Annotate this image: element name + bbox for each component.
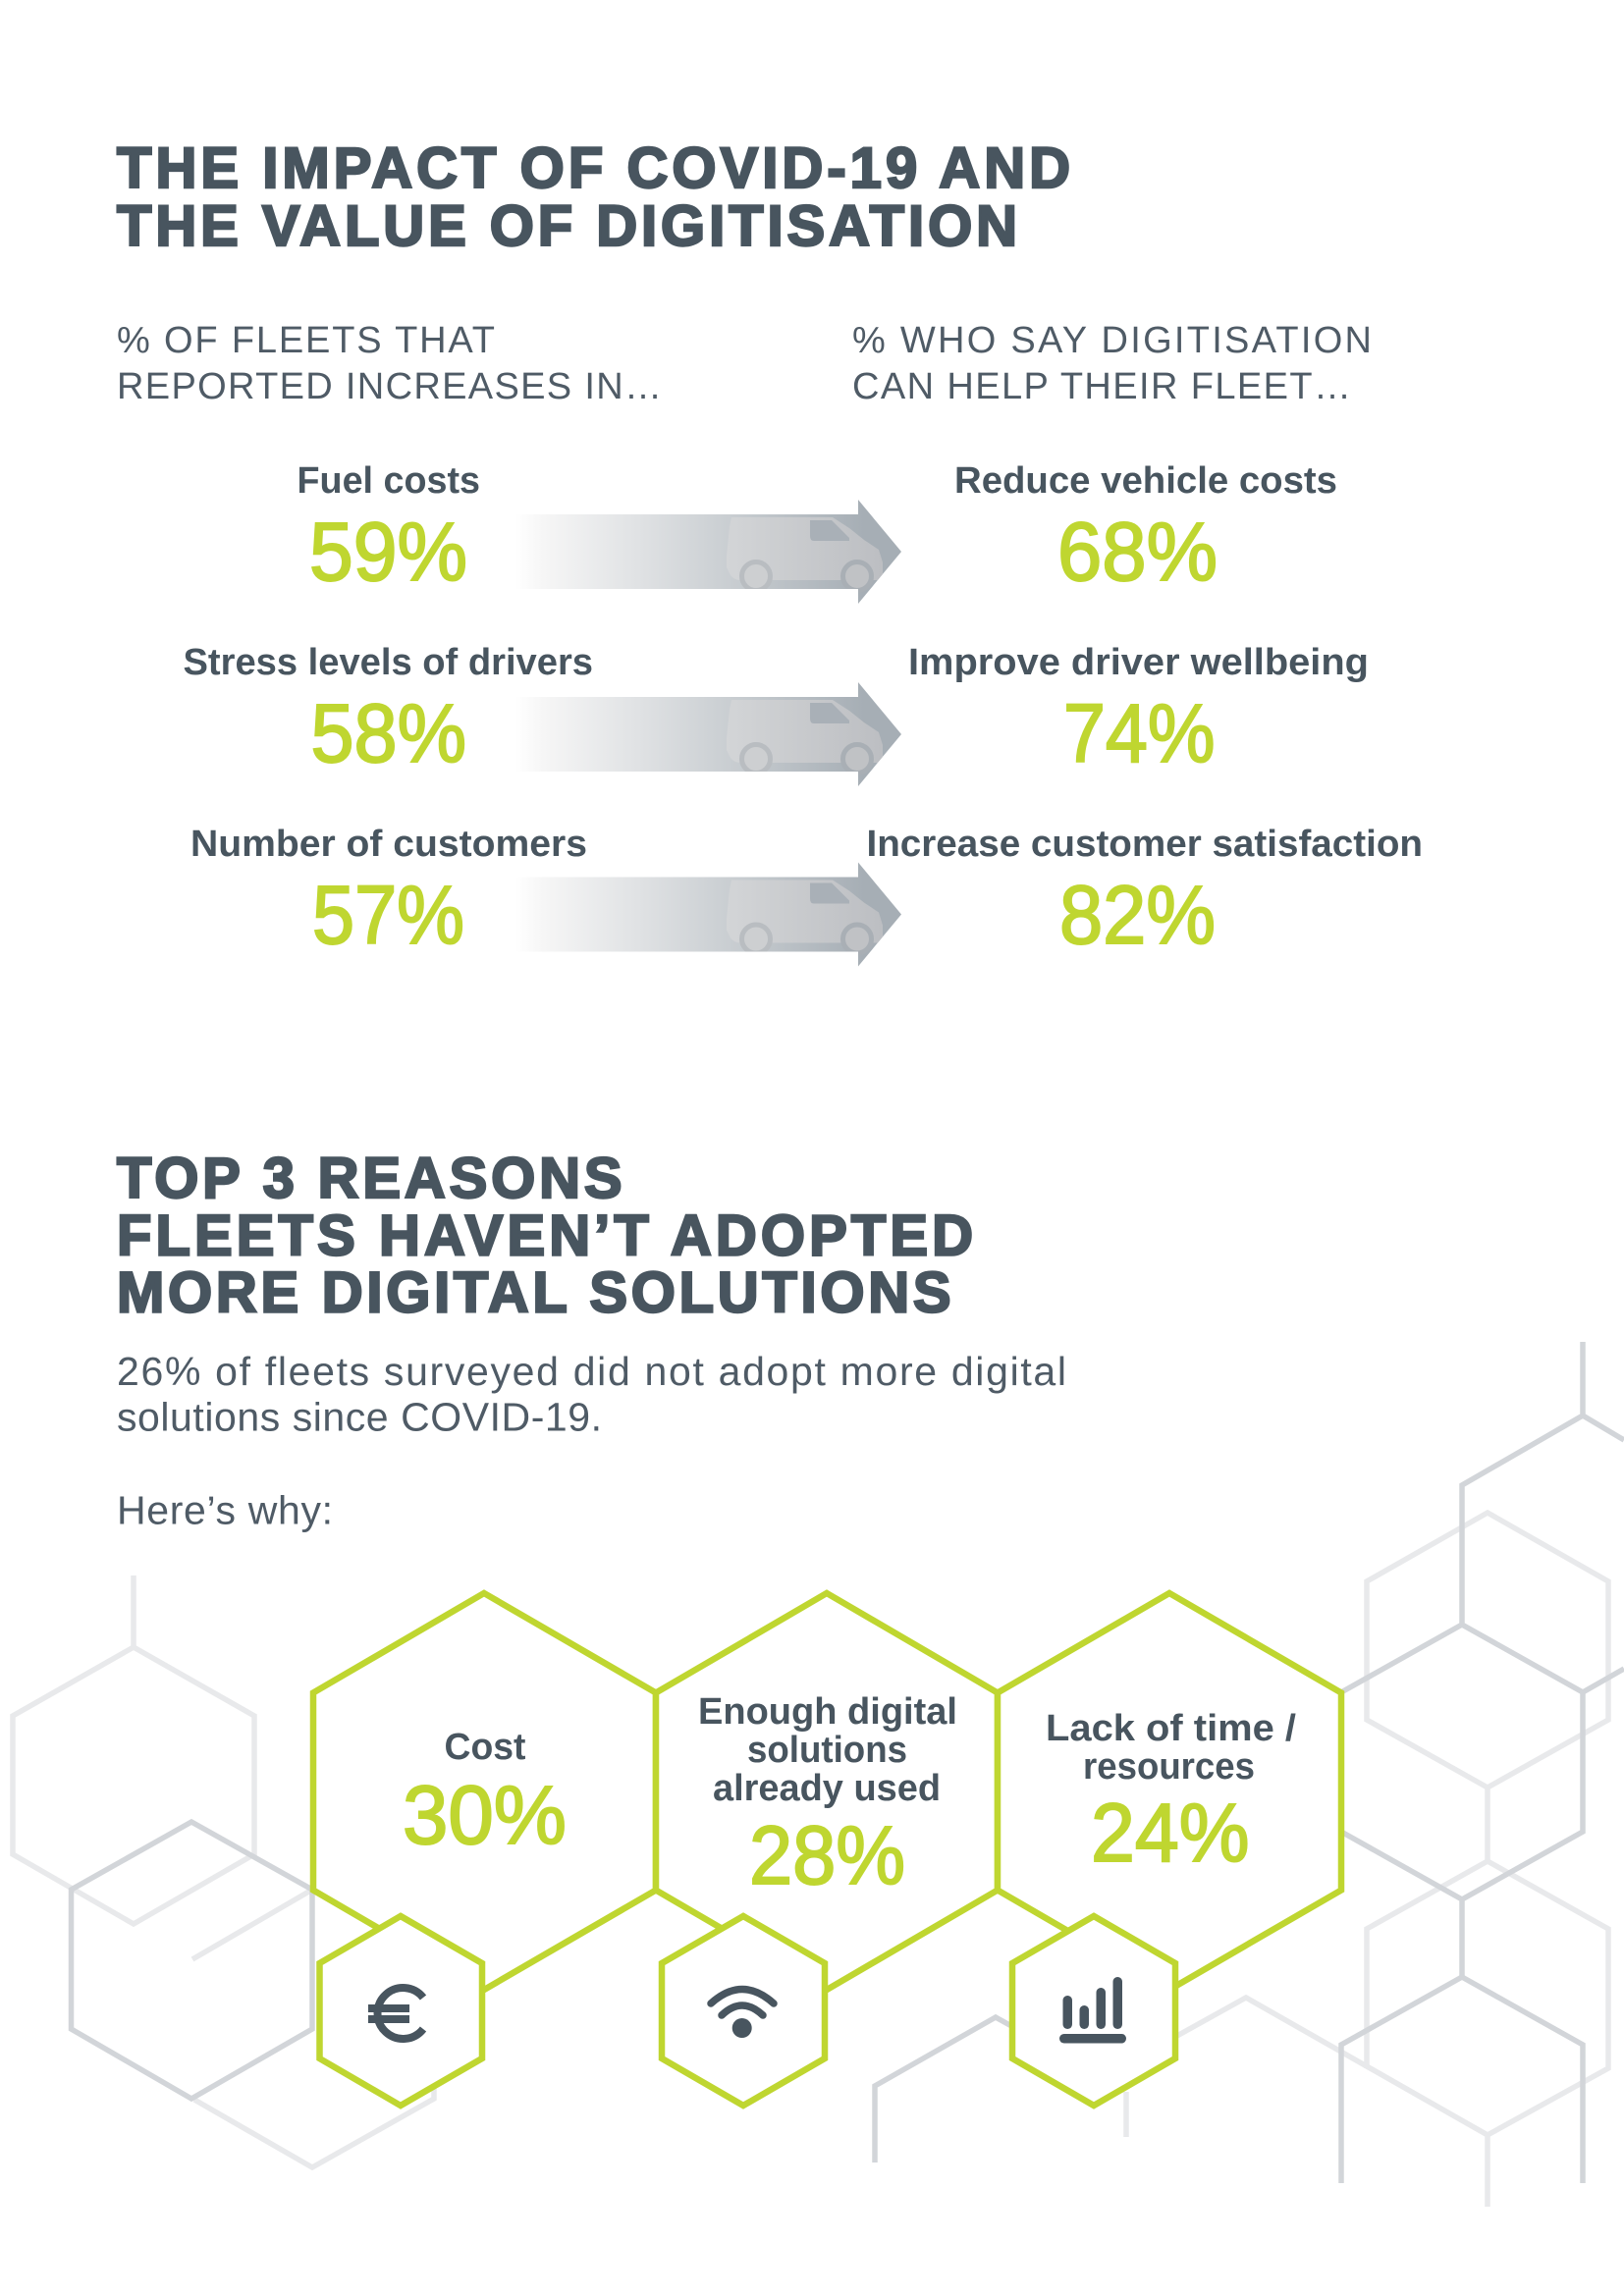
heading: impact of COVID-19: THE IMPACT OF COVID-19 AND	[117, 136, 1070, 200]
right column subheading	[852, 320, 1372, 407]
stat: stress levels 58%: 58%	[310, 687, 466, 779]
icon: bar chart	[1012, 1916, 1175, 2106]
stat: increase customer satisfaction 82%: Increase customer satisfaction	[866, 824, 1423, 865]
hexagon panel: enough digital solutions	[656, 1593, 998, 2106]
hexagon panel: enough digital solutions: already used	[713, 1768, 941, 1809]
arrow with van: row 2	[515, 682, 901, 786]
icon: euro	[320, 1916, 482, 2106]
stat: improve driver wellbeing 74%	[908, 642, 1369, 779]
hexagon panel: enough digital solutions: Enough digital	[698, 1691, 957, 1733]
hexagon panel: lack of time: 24%	[1091, 1787, 1249, 1879]
stat: reduce vehicle costs 68%	[954, 460, 1337, 598]
left column subheading: REPORTED INCREASES IN…	[117, 366, 662, 407]
arrow with van: row 3	[515, 862, 901, 966]
stat: stress levels 58%: Stress levels of drivers	[183, 642, 593, 683]
stat: fuel costs 59%	[297, 460, 480, 598]
hexagon panel: enough digital solutions: solutions	[747, 1730, 907, 1771]
stat: number of customers 57%: 57%	[312, 869, 464, 961]
hexagon panel: cost: Cost	[444, 1727, 526, 1768]
hexagon panel: cost: 30%	[403, 1769, 567, 1861]
left column subheading	[117, 320, 662, 407]
right column subheading: CAN HELP THEIR FLEET…	[852, 366, 1351, 407]
icon: wifi	[662, 1916, 825, 2106]
background hexagons: left	[13, 1575, 434, 2167]
stat: increase customer satisfaction 82%	[866, 824, 1423, 961]
left column subheading: % OF FLEETS THAT	[117, 320, 495, 361]
heading: top 3 reasons: FLEETS HAVEN’T ADOPTED	[117, 1203, 973, 1268]
stat: improve driver wellbeing 74%: 74%	[1063, 687, 1216, 779]
intro paragraph	[117, 1349, 1066, 1533]
stat: reduce vehicle costs 68%: 68%	[1057, 506, 1218, 598]
hexagon panel: lack of time: Lack of time /	[1046, 1708, 1296, 1749]
stat: increase customer satisfaction 82%: 82%	[1059, 869, 1216, 961]
arrow with van: row 1	[515, 500, 901, 604]
stat: number of customers 57%	[190, 824, 587, 961]
stat: improve driver wellbeing 74%: Improve driver wellbeing	[908, 642, 1369, 683]
intro paragraph: Here’s why:	[117, 1488, 333, 1533]
hexagon panel: lack of time: resources	[1083, 1746, 1255, 1788]
heading: impact of COVID-19: THE VALUE OF DIGITISATION	[117, 194, 1017, 258]
hexagon panel: enough digital solutions: 28%	[749, 1809, 905, 1901]
stat: stress levels 58%	[183, 642, 593, 779]
heading: top 3 reasons	[117, 1147, 973, 1325]
heading: impact of COVID-19	[117, 136, 1070, 258]
stat: number of customers 57%: Number of customers	[190, 824, 587, 865]
stat: fuel costs 59%: 59%	[309, 506, 467, 598]
intro paragraph: solutions since COVID-19.	[117, 1394, 602, 1439]
right column subheading: % WHO SAY DIGITISATION	[852, 320, 1372, 361]
stat: fuel costs 59%: Fuel costs	[297, 460, 480, 502]
stat: reduce vehicle costs 68%: Reduce vehicle costs	[954, 460, 1337, 502]
intro paragraph: 26% of fleets surveyed did not adopt more digital	[117, 1349, 1066, 1394]
heading: top 3 reasons: TOP 3 REASONS	[117, 1147, 623, 1210]
background hexagons: right	[875, 1342, 1624, 2207]
hexagon panel: lack of time	[998, 1593, 1341, 2106]
hexagon panel: cost	[313, 1593, 656, 2106]
heading: top 3 reasons: MORE DIGITAL SOLUTIONS	[117, 1260, 950, 1325]
